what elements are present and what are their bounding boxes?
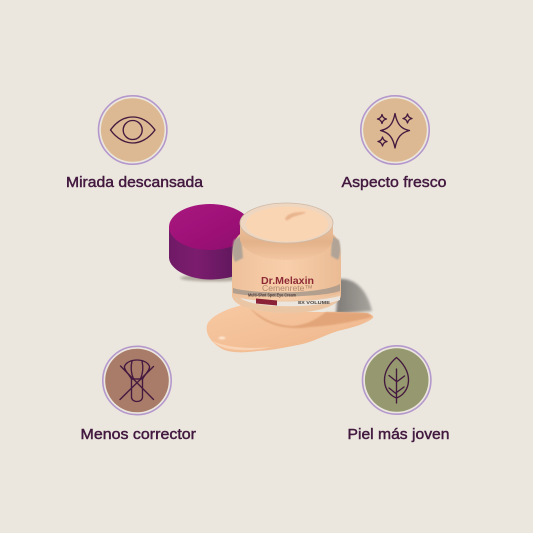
cream surface <box>246 206 328 242</box>
icon: sparkles badge <box>361 96 429 164</box>
icon: crossed-out brush badge <box>103 346 171 415</box>
jar: Multi-Shot Spot Eye Cream <box>248 292 296 298</box>
jar <box>232 203 341 313</box>
label: Menos corrector <box>80 427 196 443</box>
cream smear <box>207 305 373 352</box>
lid <box>169 204 251 282</box>
icon: leaf badge <box>362 346 431 414</box>
feature: Menos corrector <box>80 346 196 443</box>
feature: Piel más joven <box>348 346 450 443</box>
jar neck and rim <box>240 224 333 260</box>
feature: Aspecto fresco <box>342 96 446 191</box>
jar shoulder glass <box>233 236 340 262</box>
label: Aspecto fresco <box>342 175 446 191</box>
feature: Mirada descansada <box>66 96 204 191</box>
product photo <box>169 203 373 352</box>
jar: 8X VOLUME <box>298 300 330 305</box>
label: Mirada descansada <box>66 175 204 191</box>
label: Piel más joven <box>348 427 450 443</box>
jar body <box>232 234 341 313</box>
brand text: Dr.Melaxin <box>261 275 314 287</box>
jar shadow <box>336 279 372 314</box>
jar: Cemenrete™ <box>262 283 313 293</box>
label band <box>234 293 340 313</box>
icon: eye badge <box>98 96 167 164</box>
